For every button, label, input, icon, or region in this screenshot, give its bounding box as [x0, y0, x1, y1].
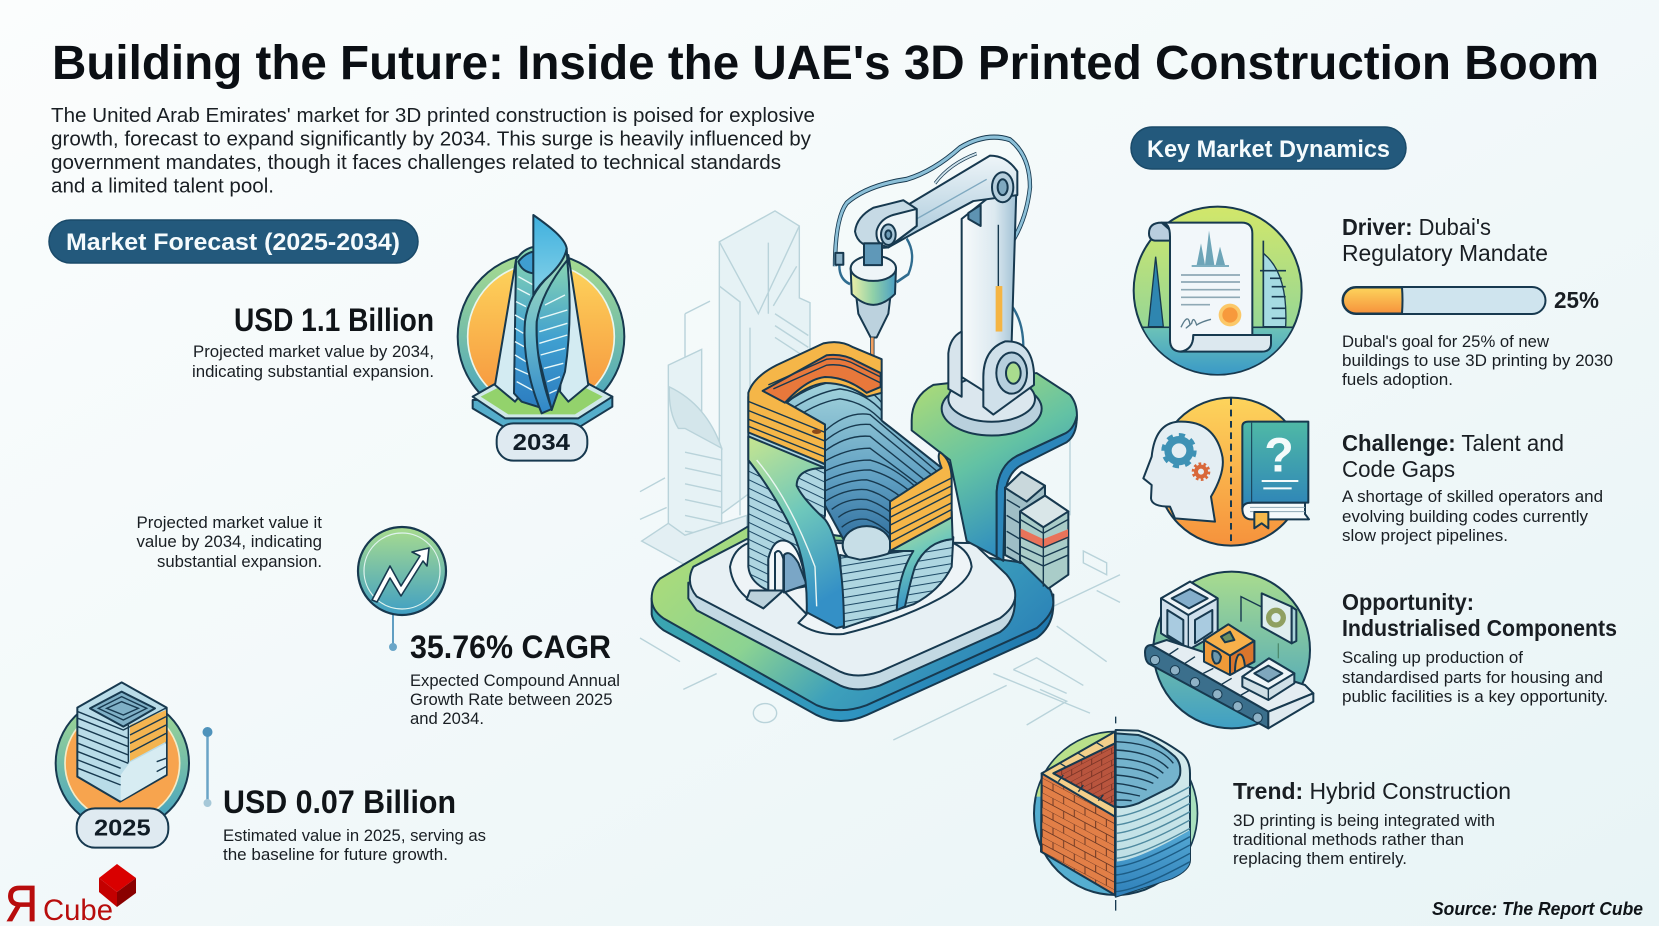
icon: growth arrow medallion [358, 527, 446, 651]
icon: head and book [1143, 398, 1309, 546]
challenge text: evolving building codes currently [1342, 507, 1588, 526]
orange block [1204, 624, 1254, 675]
opportunity text: Industrialised Components [1342, 615, 1617, 641]
2034 tower medallion [458, 215, 624, 461]
brick half [1053, 743, 1115, 807]
platform top [652, 523, 1053, 710]
year badge: 2025 [94, 815, 151, 841]
floating note left of CAGR: value by 2034, indicating [136, 532, 322, 551]
robot arm [835, 137, 1042, 436]
driver description: fuels adoption. [1342, 370, 1453, 389]
trend text: Trend: Hybrid Construction [1233, 778, 1511, 804]
RCube logo: Я [5, 875, 38, 932]
trend text: 3D printing is being integrated with [1233, 811, 1495, 830]
challenge text: Challenge: Talent and [1342, 430, 1564, 456]
material stack [1005, 472, 1068, 589]
wrist [855, 200, 917, 248]
intro paragraph: and a limited talent pool. [51, 174, 274, 198]
opportunity text: public facilities is a key opportunity. [1342, 687, 1608, 706]
plinth [730, 543, 972, 634]
icon: regulatory document [1132, 207, 1305, 378]
opportunity text: Scaling up production of [1342, 648, 1523, 667]
stat: USD 1.1 Billion: USD 1.1 Billion [234, 302, 434, 338]
stat: USD 1.1 Billion: indicating substantial expansion. [192, 362, 434, 381]
stat: 35.76% CAGR [410, 629, 620, 728]
white plate top [690, 539, 1015, 676]
icon: component conveyor [1145, 572, 1313, 728]
year badge [77, 808, 168, 848]
icon: head and book: ? [1264, 429, 1294, 483]
upright [962, 179, 1017, 393]
front curved wall [840, 537, 953, 628]
RCube logo: Cube [43, 894, 113, 927]
floating note left of CAGR: Projected market value it [136, 513, 322, 532]
stat: USD 0.07 Billion: Estimated value in 2025, serving as [223, 826, 486, 845]
driver text [1342, 214, 1548, 266]
driver description: Dubal's goal for 25% of new [1342, 332, 1550, 351]
conveyor [1145, 645, 1268, 728]
white plate side [688, 583, 1015, 689]
stat: 35.76% CAGR: Expected Compound Annual [410, 671, 620, 690]
right flow [890, 511, 953, 610]
stat: 35.76% CAGR: Growth Rate between 2025 [410, 690, 612, 709]
intro paragraph [51, 104, 815, 198]
challenge text: Code Gaps [1342, 456, 1455, 482]
RCube logo [5, 864, 136, 932]
right orange rim [890, 452, 952, 551]
column blue edge [997, 417, 1077, 561]
challenge text [1342, 430, 1603, 545]
small box [1242, 658, 1294, 700]
icon: hybrid construction [1032, 717, 1202, 911]
disc [942, 382, 1042, 436]
medallion circle [458, 253, 624, 420]
progress bar 25%: 25% [1554, 287, 1599, 313]
hose clamp [835, 253, 843, 265]
interior wall [787, 377, 942, 547]
driver text: Regulatory Mandate [1342, 240, 1548, 266]
intro paragraph: government mandates, though it faces challenges related to technical standards [51, 151, 781, 174]
printed structure [747, 342, 953, 628]
opportunity text [1342, 589, 1617, 706]
driver text: Driver: Dubai's [1342, 214, 1491, 240]
print nozzle [851, 243, 896, 362]
challenge text: slow project pipelines. [1342, 526, 1508, 545]
stat: 35.76% CAGR: and 2034. [410, 709, 484, 728]
stat: USD 1.1 Billion [192, 302, 434, 381]
trend text: traditional methods rather than [1233, 830, 1464, 849]
opportunity text: Opportunity: [1342, 589, 1474, 615]
pill heading: market forecast: Market Forecast (2025-2034) [66, 229, 400, 256]
year badge [497, 423, 587, 461]
lower pivot [983, 341, 1034, 415]
source note: Source: The Report Cube [1432, 899, 1643, 919]
upper arm [876, 156, 1017, 247]
intro paragraph: growth, forecast to expand significantly by 2034. This surge is heavily influenced by [51, 128, 812, 150]
hose [835, 137, 1030, 266]
stat: USD 0.07 Billion: the baseline for future growth. [223, 845, 448, 864]
title: Building the Future: Inside the UAE's 3D Printed Construction Boom [52, 37, 1599, 90]
challenge text: A shortage of skilled operators and [1342, 487, 1603, 506]
trend text [1233, 778, 1511, 868]
left outer wall [748, 397, 825, 591]
trend text: replacing them entirely. [1233, 849, 1407, 868]
arch [768, 540, 805, 593]
stat: USD 1.1 Billion: Projected market value by 2034, [193, 342, 434, 361]
printed half [1116, 730, 1190, 897]
timeline connector [202, 727, 212, 807]
tower [495, 215, 588, 413]
driver description [1342, 332, 1613, 389]
floating note left of CAGR: substantial expansion. [157, 552, 322, 571]
pill heading: key market dynamics: Key Market Dynamics [1147, 136, 1390, 163]
front green flow [748, 436, 844, 628]
central illustration: 3D printing robot and structure [640, 137, 1120, 740]
stat: USD 0.07 Billion [223, 784, 486, 864]
ghost skyline and blueprint lines [640, 211, 1120, 740]
stat: USD 0.07 Billion: USD 0.07 Billion [223, 784, 456, 820]
progress bar 25% [1342, 287, 1599, 314]
base [473, 397, 612, 428]
pill heading: market forecast [49, 220, 418, 263]
year badge: 2034 [513, 429, 570, 455]
pill heading: key market dynamics [1131, 127, 1406, 169]
floating note left of CAGR [136, 513, 322, 571]
stat: 35.76% CAGR: 35.76% CAGR [410, 629, 611, 665]
tall block [1161, 582, 1218, 650]
left orange rim [748, 342, 882, 464]
platform side [652, 594, 1053, 721]
printed block [77, 682, 167, 802]
green robot column [912, 373, 1077, 557]
driver description: buildings to use 3D printing by 2030 [1342, 351, 1613, 370]
intro paragraph: The United Arab Emirates' market for 3D printed construction is poised for explosive [51, 104, 815, 127]
opportunity text: standardised parts for housing and [1342, 668, 1603, 687]
panel [1241, 597, 1261, 622]
2025 medallion [56, 682, 189, 848]
